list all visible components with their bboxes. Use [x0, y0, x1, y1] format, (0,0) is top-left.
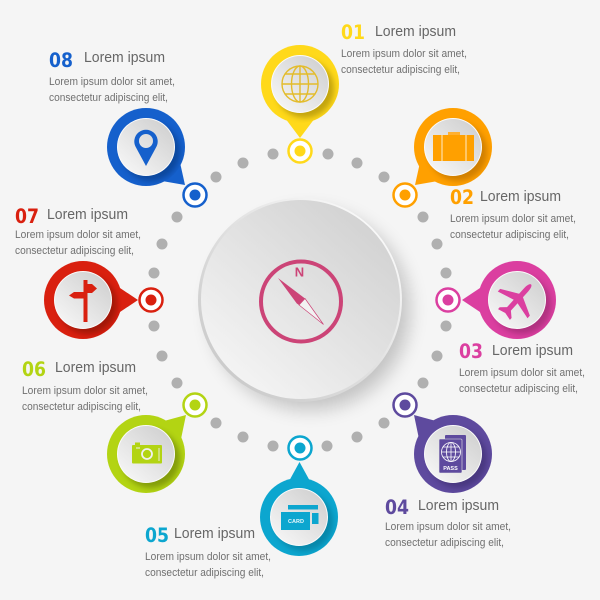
icon: globe: [282, 66, 318, 102]
icon: compass: [261, 262, 341, 342]
marker 03: plane: [436, 261, 556, 339]
icon: suitcase: [433, 132, 474, 161]
text block 07: Lorem ipsum: [47, 206, 128, 223]
text block 01: [341, 21, 467, 76]
marker 06: camera: [107, 394, 206, 493]
text block 03: Lorem ipsum: [492, 342, 573, 359]
text block 01: Lorem ipsum: [375, 23, 456, 40]
text block 02: consectetur adipiscing elit,: [450, 229, 569, 241]
ring marker 08: [184, 184, 206, 206]
text block 03: consectetur adipiscing elit,: [459, 383, 578, 395]
icon: compass: N: [295, 264, 304, 280]
ring marker 01: [288, 140, 312, 162]
text block 02: [450, 186, 576, 241]
text block 01: consectetur adipiscing elit,: [341, 64, 460, 76]
icon: camera: [132, 442, 162, 464]
central compass disc: [198, 198, 410, 410]
text block 05: 05: [145, 524, 169, 547]
text block 06: 06: [22, 358, 46, 381]
text block 08: [49, 49, 175, 104]
text block 02: 02: [450, 186, 474, 209]
text block 07: consectetur adipiscing elit,: [15, 245, 134, 257]
text block 07: 07: [15, 205, 39, 228]
text block 05: Lorem ipsum: [174, 525, 255, 542]
marker 08: location pin: [107, 108, 206, 206]
text block 06: Lorem ipsum: [55, 359, 136, 376]
text block 05: [145, 524, 271, 579]
ring marker 02: [394, 184, 416, 206]
text block 01: Lorem ipsum dolor sit amet,: [341, 48, 467, 60]
text block 03: 03: [459, 340, 483, 363]
icon: passport: PASS: [443, 466, 458, 472]
ring marker 05: [288, 436, 312, 460]
marker 04: passport: [394, 394, 492, 493]
text block 01: 01: [341, 21, 365, 44]
text block 03: Lorem ipsum dolor sit amet,: [459, 367, 585, 379]
text block 07: Lorem ipsum dolor sit amet,: [15, 229, 141, 241]
text block 02: Lorem ipsum dolor sit amet,: [450, 213, 576, 225]
text block 04: Lorem ipsum dolor sit amet,: [385, 521, 511, 533]
icon: location pin: [134, 130, 158, 166]
ring marker 04: [394, 394, 416, 416]
text block 04: Lorem ipsum: [418, 497, 499, 514]
marker 02: suitcase: [394, 108, 492, 206]
ring marker 07: [140, 288, 162, 312]
text block 04: [385, 496, 511, 549]
ring marker 06: [184, 394, 206, 416]
text block 03: [459, 340, 585, 395]
text block 04: consectetur adipiscing elit,: [385, 537, 504, 549]
text block 06: consectetur adipiscing elit,: [22, 401, 141, 413]
text block 02: Lorem ipsum: [480, 188, 561, 205]
text block 04: 04: [385, 496, 409, 519]
ring marker 03: [436, 288, 460, 312]
text block 07: [15, 205, 141, 257]
text block 05: Lorem ipsum dolor sit amet,: [145, 551, 271, 563]
text block 06: Lorem ipsum dolor sit amet,: [22, 385, 148, 397]
marker 07: signpost: [44, 261, 162, 339]
text block 05: consectetur adipiscing elit,: [145, 567, 264, 579]
dotted ring connecting the markers: [148, 148, 452, 452]
marker 05: card: [260, 436, 338, 556]
icon: signpost: [69, 280, 97, 322]
text block 06: [22, 358, 148, 413]
text block 08: 08: [49, 49, 73, 72]
icon: cards: CARD: [288, 519, 304, 525]
icon: plane: [489, 271, 546, 328]
marker 01: globe: [261, 45, 339, 162]
text block 08: consectetur adipiscing elit,: [49, 92, 168, 104]
text block 08: Lorem ipsum dolor sit amet,: [49, 76, 175, 88]
text block 08: Lorem ipsum: [84, 49, 165, 66]
